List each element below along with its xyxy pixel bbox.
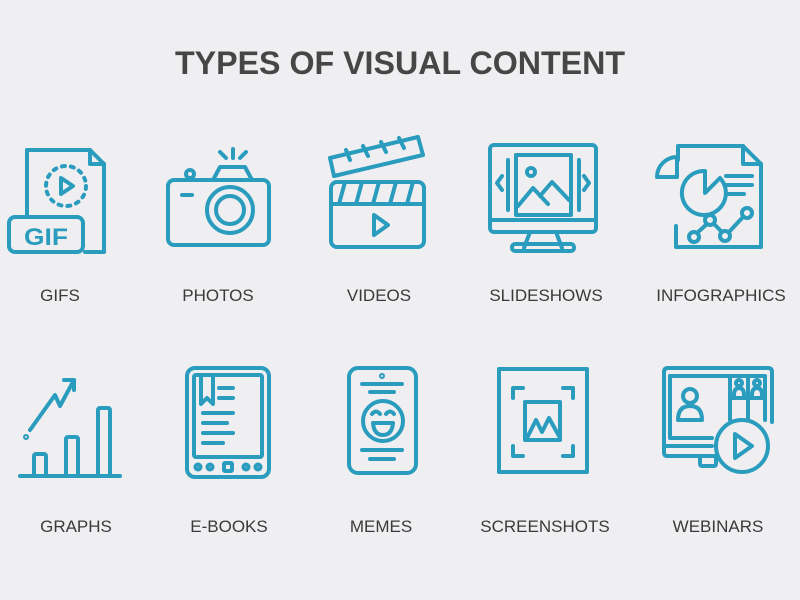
labels: WEBINARS: [673, 517, 763, 536]
icon: camera: [168, 149, 269, 245]
icon: slideshows: [490, 145, 596, 251]
labels: INFOGRAPHICS: [656, 286, 786, 305]
icon: webinars: [664, 368, 772, 472]
labels: MEMES: [350, 517, 412, 536]
labels: SCREENSHOTS: [480, 517, 610, 536]
title: TYPES OF VISUAL CONTENT: [175, 45, 625, 81]
labels: E-BOOKS: [190, 517, 268, 536]
icon: gif: GIF: [24, 224, 68, 251]
labels: GRAPHS: [40, 517, 112, 536]
icon: memes: [349, 368, 416, 473]
labels: GIFS: [40, 286, 80, 305]
icon: screenshots: [499, 369, 587, 472]
icon: graphs: [20, 380, 120, 476]
icon: videos: [330, 137, 424, 247]
labels: PHOTOS: [182, 286, 254, 305]
icon: infographics: [657, 146, 761, 247]
labels: VIDEOS: [347, 286, 411, 305]
labels: [40, 286, 786, 536]
labels: SLIDESHOWS: [489, 286, 603, 305]
icon: gif: [9, 150, 104, 252]
icon: e-books: [187, 368, 269, 477]
